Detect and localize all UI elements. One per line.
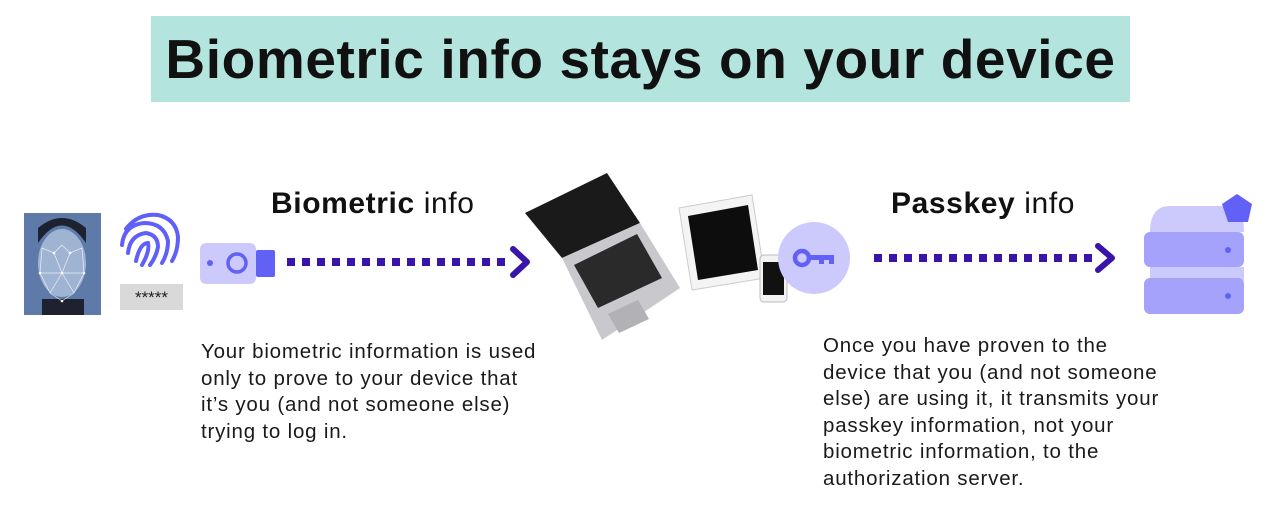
text: passkey explanation: Once you have proven to the (823, 334, 1108, 357)
password box (120, 284, 183, 310)
icon: fingerprint (120, 212, 180, 267)
text: passkey explanation (823, 334, 1159, 490)
icon: face scan (24, 213, 101, 315)
title (151, 16, 1130, 102)
text: biometric explanation (201, 340, 536, 442)
icon: usb security key (200, 243, 275, 284)
text: passkey explanation: authorization server. (823, 466, 1024, 490)
text: biometric explanation: Your biometric information is used (201, 340, 536, 363)
arrow: device to server (874, 243, 1115, 273)
text: passkey explanation: passkey information, not your (823, 414, 1114, 436)
icon: devices (laptop, tablet, phone) (525, 173, 788, 340)
arrow: biometric to device (287, 246, 530, 278)
text: biometric explanation: trying to log in. (201, 420, 348, 442)
text: passkey explanation: device that you (and not someone (823, 360, 1157, 384)
text: biometric explanation: it’s you (and not someone else) (201, 393, 510, 416)
text: biometric explanation: only to prove to your device that (201, 366, 518, 390)
icon: key circle (778, 222, 850, 294)
text: passkey explanation: biometric information, to the (823, 440, 1099, 463)
icon: authorization server (1144, 194, 1252, 314)
text: passkey explanation: else) are using it, it transmits your (823, 387, 1159, 410)
heading: biometric info: Biometric info (271, 187, 474, 220)
password box: ***** (135, 288, 168, 307)
title: Biometric info stays on your device (165, 28, 1116, 90)
heading: passkey info: Passkey info (891, 187, 1075, 220)
